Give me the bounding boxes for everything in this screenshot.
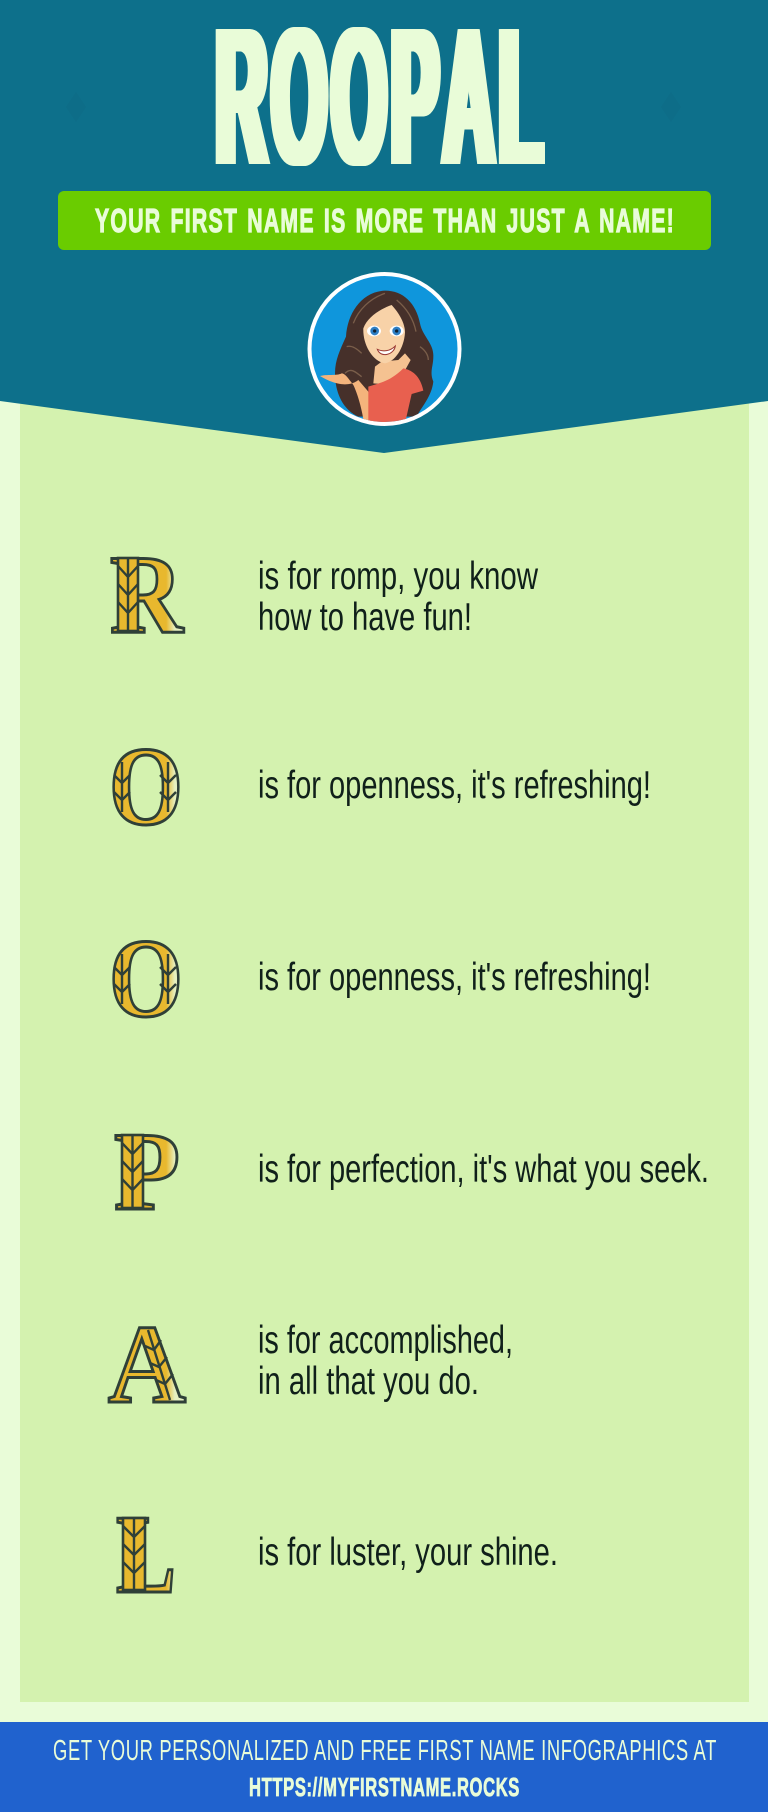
row 5: text: in all that you do.: [258, 1360, 479, 1403]
row 4: illustrated letter P: P: [114, 1110, 180, 1234]
row 1: text: how to have fun!: [258, 596, 472, 639]
row 5: text: is for accomplished,: [258, 1319, 513, 1362]
footer bar: HTTPS://MYFIRSTNAME.ROCKS: [249, 1772, 520, 1802]
row 1: text: [258, 555, 539, 639]
header background: [0, 0, 768, 453]
row 3: illustrated letter O: O: [109, 917, 183, 1041]
row 1: illustrated letter R: R: [110, 533, 184, 657]
row 1: text: is for romp, you know: [258, 555, 539, 598]
row 6: text: is for luster, your shine.: [258, 1531, 558, 1574]
row 5: illustrated letter A: A: [108, 1303, 186, 1427]
footer bar: [0, 1722, 768, 1812]
tagline banner: [58, 191, 711, 250]
row 5: text: [258, 1319, 513, 1403]
panel: green content area: [20, 380, 749, 1702]
row 6: illustrated letter L: L: [116, 1493, 176, 1617]
portrait: woman avatar: [308, 272, 462, 426]
row 2: illustrated letter O: O: [109, 725, 183, 849]
